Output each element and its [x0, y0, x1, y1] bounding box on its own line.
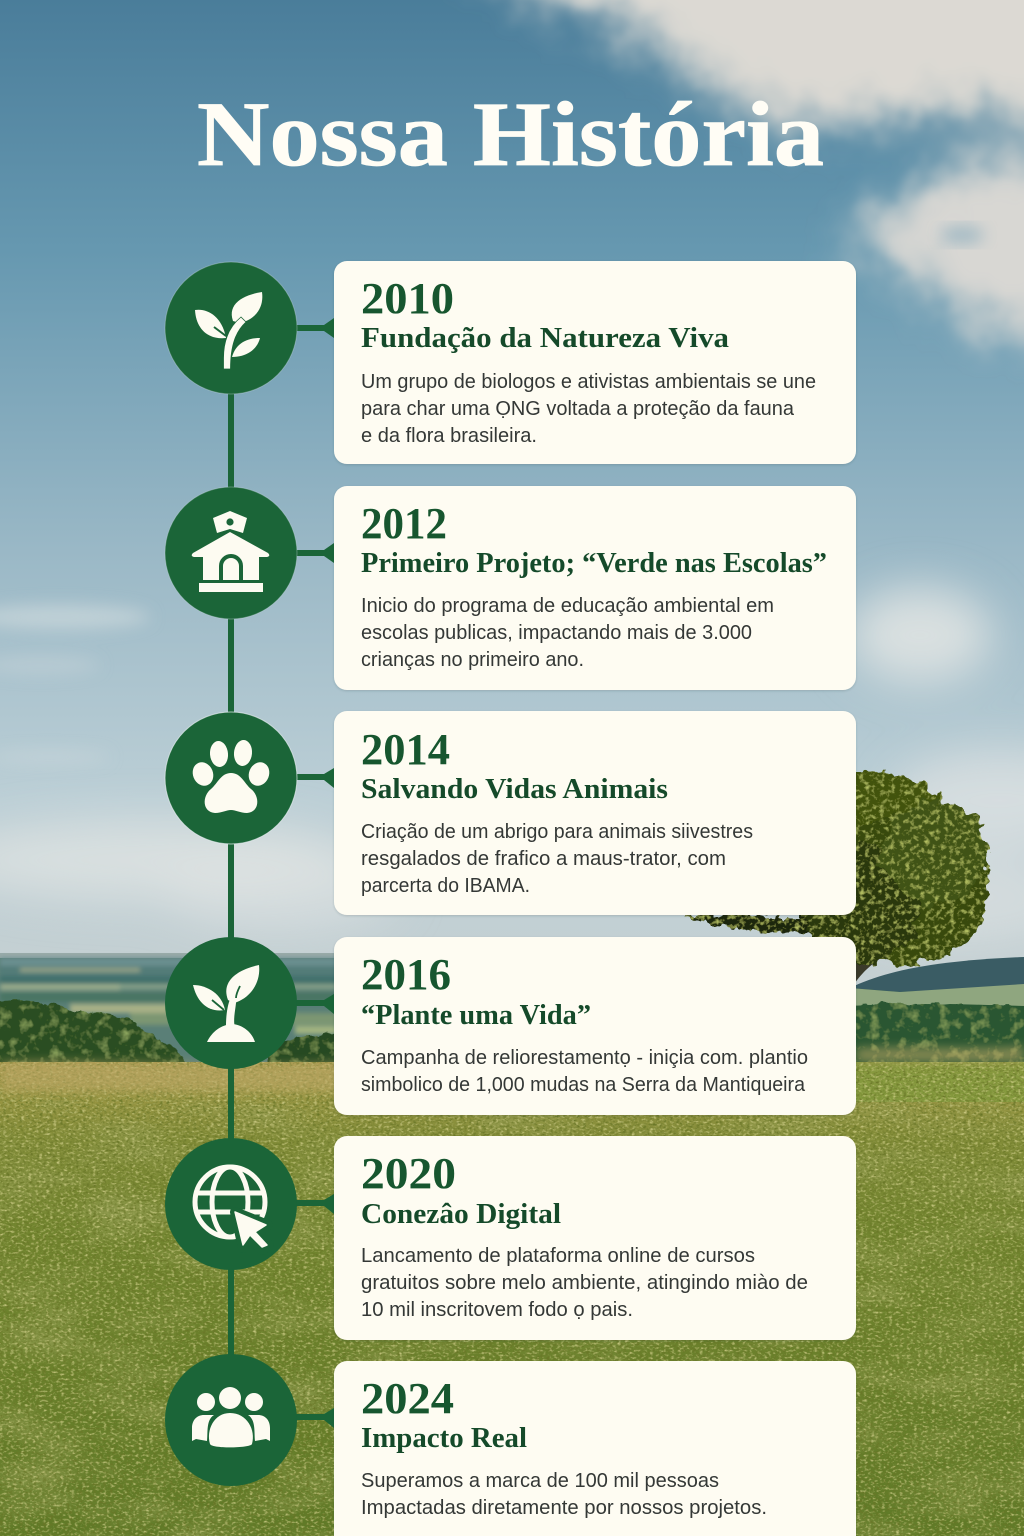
- card 2024: 2024: [361, 1374, 454, 1423]
- card 2010: para char uma ỌNG voltada a proteção da fauna: [361, 398, 795, 420]
- card 2016: “Plante uma Vida”: [361, 999, 591, 1031]
- card 2020: Conezâo Digital: [361, 1198, 561, 1230]
- connector 2020: [290, 1194, 334, 1214]
- card 2012: escolas publicas, impactando mais de 3.000: [361, 622, 752, 644]
- distant land: [0, 953, 1024, 1080]
- card 2014: [334, 711, 856, 915]
- title: Nossa História: [197, 83, 824, 185]
- icon: plant: [165, 262, 297, 394]
- card 2010: e da flora brasileira.: [361, 425, 537, 447]
- card 2010: Fundação da Natureza Viva: [361, 322, 730, 354]
- card 2012: 2012: [361, 499, 447, 548]
- card 2014: 2014: [361, 725, 450, 774]
- card 2024: Superamos a marca de 100 mil pessoas: [361, 1470, 719, 1492]
- connector 2010: [290, 318, 334, 338]
- card 2020: Lancamento de plataforma online de cursos: [361, 1245, 755, 1267]
- icon: globe and cursor: [165, 1138, 297, 1270]
- card 2012: crianças no primeiro ano.: [361, 649, 584, 671]
- card 2012: [334, 486, 856, 690]
- card 2020: 2020: [361, 1149, 456, 1198]
- milestone 2012: [165, 486, 856, 690]
- forest: [0, 1000, 1024, 1078]
- connector 2014: [290, 768, 334, 788]
- tree: [680, 771, 988, 986]
- card 2010: 2010: [361, 274, 454, 323]
- connector 2012: [290, 543, 334, 563]
- grass field: [0, 1046, 1024, 1536]
- card 2014: resgalados de frafico a maus-trator, com: [361, 848, 726, 870]
- card 2024: [334, 1361, 856, 1536]
- clouds: [0, 0, 1024, 944]
- milestone 2016: [165, 937, 856, 1115]
- card 2016: [334, 937, 856, 1115]
- card 2020: 10 mil inscritovem fodo ọ pais.: [361, 1299, 633, 1321]
- milestone 2024: [165, 1354, 856, 1536]
- card 2016: Campanha de reliorestamentọ - iniçia com. plantio: [361, 1047, 808, 1069]
- card 2012: Primeiro Projeto; “Verde nas Escolas”: [361, 547, 827, 579]
- card 2014: parcerta do IBAMA.: [361, 875, 530, 897]
- icon: sprout: [165, 937, 297, 1069]
- milestone 2020: [165, 1136, 856, 1340]
- icon: school: [165, 487, 297, 619]
- card 2024: Impactadas diretamente por nossos projetos.: [361, 1497, 767, 1519]
- card 2024: Impacto Real: [361, 1422, 527, 1454]
- icon: paw: [165, 712, 297, 844]
- milestone 2010: [165, 261, 856, 464]
- timeline vertical line: [228, 328, 234, 1420]
- card 2014: Salvando Vidas Animais: [361, 773, 668, 805]
- card 2014: Criação de um abrigo para animais siivestres: [361, 821, 753, 843]
- icon: people: [165, 1354, 297, 1486]
- connector 2024: [290, 1408, 334, 1428]
- card 2010: Um grupo de biologos e ativistas ambientais se une: [361, 371, 816, 393]
- card 2016: 2016: [361, 950, 451, 999]
- connector 2016: [290, 994, 334, 1014]
- card 2010: [334, 261, 856, 464]
- card 2020: [334, 1136, 856, 1340]
- card 2020: gratuitos sobre melo ambiente, atingindo miào de: [361, 1272, 808, 1294]
- card 2016: simbolico de 1,000 mudas na Serra da Mantiqueira: [361, 1074, 806, 1096]
- milestone 2014: [165, 711, 856, 915]
- card 2012: Inicio do programa de educação ambiental em: [361, 595, 774, 617]
